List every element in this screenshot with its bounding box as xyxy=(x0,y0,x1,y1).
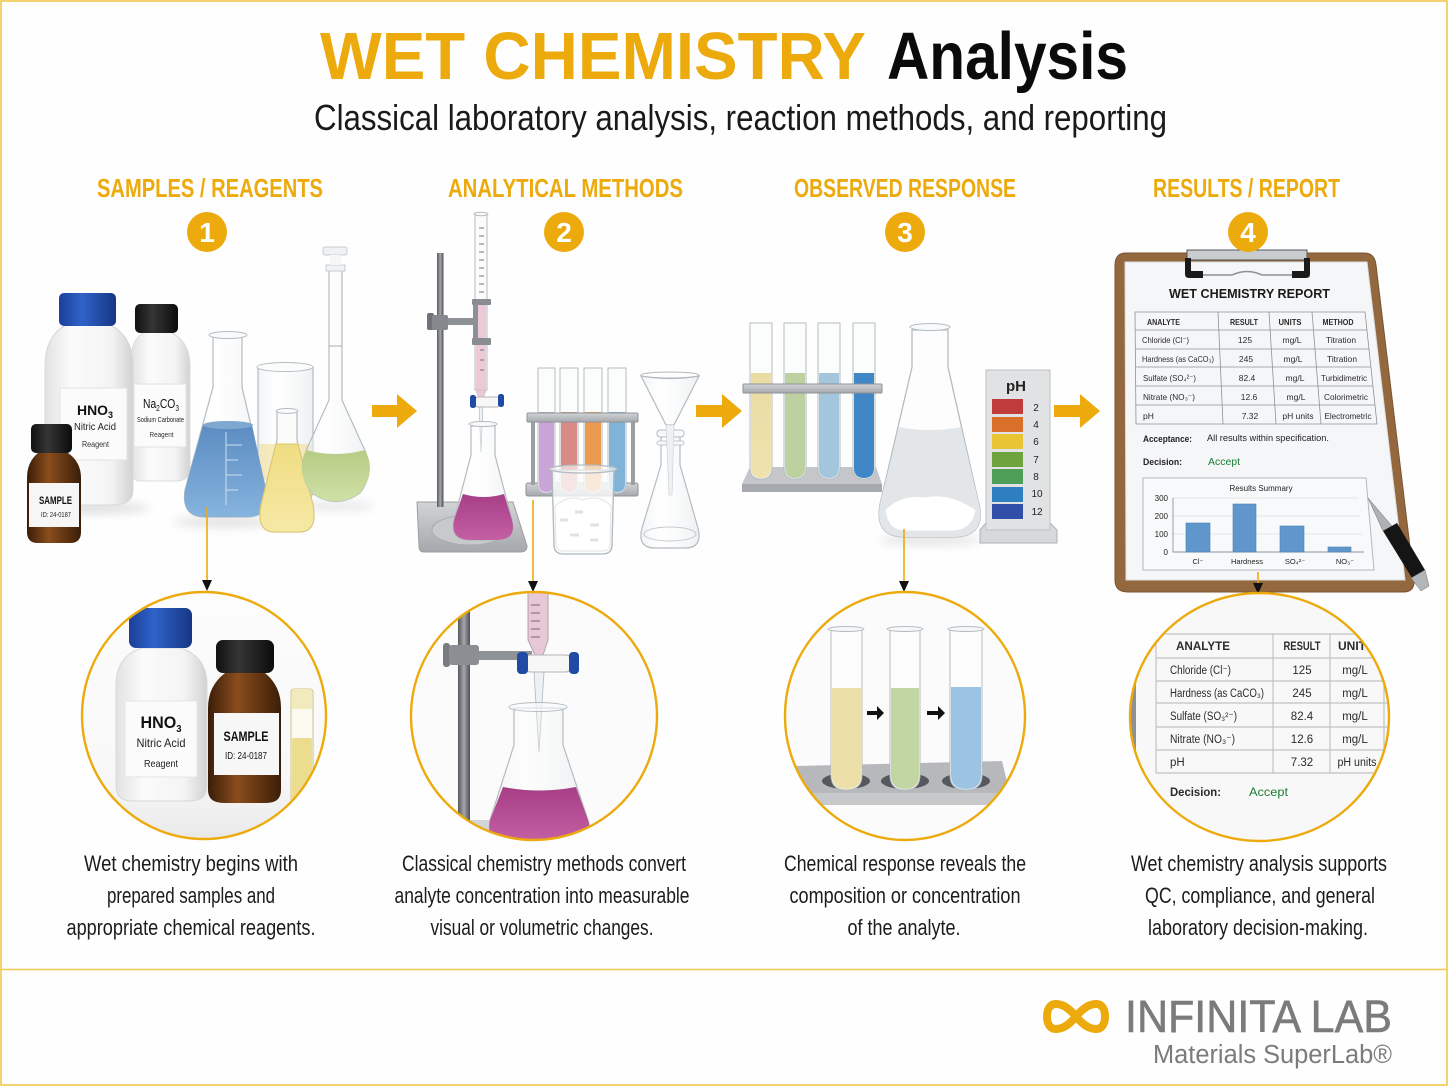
icon: pH colour card: pH xyxy=(1006,378,1026,395)
bar chart: results summary: 200 xyxy=(1155,512,1169,521)
panel: detail circle 2, titration close-up xyxy=(410,590,660,842)
report table: mg/L xyxy=(1286,373,1305,383)
arrow: connector to circle 2 xyxy=(528,500,538,592)
panel: detail circle 4, report close-up: mg/L xyxy=(1342,711,1368,723)
acceptance and decision xyxy=(1143,433,1329,468)
report table: pH units xyxy=(1282,411,1314,421)
panel: detail circle 4, report close-up: 125 xyxy=(1292,665,1312,677)
panel: detail circle 4, report close-up: 7.32 xyxy=(1291,757,1313,769)
report table: 12.6 xyxy=(1241,392,1258,402)
icon: pH colour card: 12 xyxy=(1031,507,1043,518)
icon: retort rod and clamp xyxy=(427,253,475,507)
text block: caption 2: visual or volumetric changes. xyxy=(430,915,654,940)
text block: caption 3: composition or concentration xyxy=(790,883,1020,908)
clipboard board xyxy=(1115,253,1414,592)
icon: white reagent bottle Na2CO3 xyxy=(132,304,190,481)
icon: infinity symbol xyxy=(1047,1004,1105,1029)
arrow: connector to circle 4 xyxy=(1253,572,1263,594)
report table: 245 xyxy=(1239,354,1253,364)
acceptance and decision: Accept xyxy=(1208,457,1240,468)
panel: detail circle 4, report close-up: Hardness (as CaCO₃) xyxy=(1170,688,1264,700)
panel: detail circle 1, reagents close-up: 3 xyxy=(176,724,182,735)
panel: detail circle 4, report close-up: ANALYTE xyxy=(1176,641,1230,653)
arrow: step 3 to 4 xyxy=(1054,394,1100,428)
step number 3: 3 xyxy=(897,217,913,248)
text block: caption 1 xyxy=(66,851,316,940)
report table: Hardness (as CaCO₃) xyxy=(1142,354,1214,364)
icon: beaker xyxy=(257,362,313,500)
icon: white reagent bottle Na2CO3: Sodium Carbonate xyxy=(137,415,184,424)
panel 1 equipment: bottles and glassware xyxy=(27,247,375,543)
report table: RESULT xyxy=(1230,317,1259,327)
panel: detail circle 4, report close-up: 245 xyxy=(1292,688,1312,700)
panel: detail circle 4, report close-up: mg/L xyxy=(1342,734,1368,746)
arrow: connector to circle 1 xyxy=(202,507,212,591)
icon: amber sample bottle: SAMPLE xyxy=(39,495,72,507)
icon: white reagent bottle HNO3: Reagent xyxy=(82,440,110,449)
icon: pH colour card: 6 xyxy=(1033,437,1039,448)
step number 2: 2 xyxy=(556,217,572,248)
icon: stand base plate xyxy=(417,502,527,552)
icon: funnel and empty flask xyxy=(641,372,699,548)
title: Analysis xyxy=(887,19,1128,94)
title: WET CHEMISTRY xyxy=(320,19,866,94)
text block: caption 1: Wet chemistry begins with xyxy=(84,851,298,876)
report table: pH xyxy=(1143,411,1154,421)
heading: observed response: OBSERVED RESPONSE xyxy=(794,173,1016,203)
panel: detail circle 1, reagents close-up: Nitric Acid xyxy=(136,736,186,750)
panel: detail circle 1, reagents close-up: ID: 24-0187 xyxy=(225,751,267,762)
panel: detail circle 4, report close-up: mg/L xyxy=(1342,665,1368,677)
logo tagline: Materials SuperLab® xyxy=(1153,1041,1392,1069)
panel 2 equipment: titration set-up xyxy=(417,212,699,554)
panel 3 equipment: colour change tubes, flask and pH card xyxy=(742,323,1057,544)
panel: detail circle 4, report close-up: 82.4 xyxy=(1291,711,1314,723)
report table: Electrometric xyxy=(1324,411,1372,421)
icon: pen xyxy=(1368,498,1429,591)
icon: erlenmeyer flask with white solids xyxy=(879,324,980,537)
bar chart: results summary: 300 xyxy=(1155,494,1169,503)
arrow: step 2 to 3 xyxy=(696,394,742,428)
text block: caption 2 xyxy=(394,851,690,940)
panel: detail circle 1, reagents close-up xyxy=(80,590,330,840)
acceptance and decision: All results within specification. xyxy=(1207,433,1329,443)
panel: detail circle 1, reagents close-up: SAMPLE xyxy=(224,728,268,744)
step number 3 xyxy=(885,212,925,252)
report table: Titration xyxy=(1327,354,1357,364)
report table: Titration xyxy=(1326,335,1356,345)
icon: burette with stopcock xyxy=(470,212,504,452)
text block: caption 4: Wet chemistry analysis supports xyxy=(1131,851,1387,876)
report table: ANALYTE xyxy=(1147,317,1180,327)
panel: detail circle 4, report close-up: pH units xyxy=(1338,757,1377,769)
report table: Chloride (Cl⁻) xyxy=(1142,335,1189,345)
panel: detail circle 4, report close-up: UNITS xyxy=(1338,641,1374,653)
heading: analytical methods: ANALYTICAL METHODS xyxy=(448,173,683,203)
panel: detail circle 4, report close-up: pH xyxy=(1170,757,1185,769)
bar chart: results summary: Hardness xyxy=(1231,557,1263,566)
icon: white reagent bottle Na2CO3: 2 xyxy=(156,404,160,413)
icon: pH colour card xyxy=(980,370,1057,543)
report table: mg/L xyxy=(1287,392,1306,402)
icon: white reagent bottle Na2CO3: CO xyxy=(160,397,176,411)
arrow: connector to circle 3 xyxy=(899,529,909,592)
text block: caption 1: prepared samples and xyxy=(107,883,275,908)
report table: mg/L xyxy=(1283,335,1302,345)
bar chart: results summary: Results Summary xyxy=(1229,484,1293,493)
icon: test tube rack with coloured tubes xyxy=(526,368,638,496)
icon: white reagent bottle Na2CO3: 3 xyxy=(175,404,179,413)
heading: samples / reagents: SAMPLES / REAGENTS xyxy=(97,173,323,203)
text block: caption 2: Classical chemistry methods convert xyxy=(402,851,686,876)
report table xyxy=(1135,312,1377,424)
report table: Sulfate (SO₄²⁻) xyxy=(1143,373,1196,383)
icon: pH colour card: 2 xyxy=(1033,403,1039,414)
footer divider xyxy=(1,968,1447,970)
panel: detail circle 4, report close-up: Accept xyxy=(1249,785,1289,799)
icon: white reagent bottle Na2CO3: Reagent xyxy=(150,430,174,439)
text block: caption 3 xyxy=(784,851,1026,940)
text block: caption 4 xyxy=(1131,851,1387,940)
text block: caption 4: QC, compliance, and general xyxy=(1145,883,1375,908)
bar chart: results summary: 100 xyxy=(1155,530,1169,539)
icon: beaker with white powder xyxy=(549,465,617,554)
panel 4 equipment: clipboard report xyxy=(1115,250,1429,592)
text block: caption 2: analyte concentration into measurable xyxy=(394,883,690,908)
icon: amber sample bottle xyxy=(27,424,81,543)
icon: white reagent bottle Na2CO3: Na xyxy=(143,397,159,411)
report table: Colorimetric xyxy=(1324,392,1369,402)
step number 4 xyxy=(1228,212,1268,252)
bar chart: results summary: NO₃⁻ xyxy=(1336,557,1354,566)
title xyxy=(320,19,1128,94)
panel: detail circle 4, report close-up: RESULT xyxy=(1284,641,1320,653)
panel: detail circle 4, report close-up: Nitrate (NO₃⁻) xyxy=(1170,734,1235,746)
acceptance and decision: Acceptance: xyxy=(1143,434,1192,444)
bar chart: results summary xyxy=(1143,478,1374,570)
step number 1: 1 xyxy=(199,217,215,248)
report table: UNITS xyxy=(1278,317,1302,327)
report paper xyxy=(1125,262,1405,580)
report table: mg/L xyxy=(1284,354,1303,364)
text block: caption 3: of the analyte. xyxy=(848,915,960,940)
icon: pH colour card: 4 xyxy=(1033,420,1039,431)
icon: volumetric flask green xyxy=(302,247,370,502)
report title: WET CHEMISTRY REPORT xyxy=(1169,287,1330,301)
icon: rack of four test tubes xyxy=(742,323,882,492)
panel: detail circle 4, report close-up xyxy=(1125,590,1395,845)
text block: caption 4: laboratory decision-making. xyxy=(1148,915,1368,940)
icon: pH colour card: 7 xyxy=(1033,455,1039,466)
report table: 125 xyxy=(1238,335,1252,345)
panel: detail circle 1, reagents close-up: HNO xyxy=(140,713,178,732)
report table: 7.32 xyxy=(1242,411,1259,421)
logo wordmark: INFINITA LAB xyxy=(1125,991,1392,1042)
icon: pH colour card: 10 xyxy=(1031,489,1043,500)
icon: white reagent bottle HNO3: HNO xyxy=(77,402,108,418)
report table: 82.4 xyxy=(1239,373,1256,383)
text block: caption 1: appropriate chemical reagents. xyxy=(66,915,316,940)
acceptance and decision: Decision: xyxy=(1143,457,1182,467)
logo: Infinita Lab xyxy=(1047,991,1392,1069)
text block: caption 3: Chemical response reveals the xyxy=(784,851,1026,876)
bar chart: results summary: Cl⁻ xyxy=(1192,557,1204,566)
icon: white reagent bottle HNO3: Nitric Acid xyxy=(74,422,116,433)
panel: detail circle 4, report close-up: Decision: xyxy=(1170,787,1221,799)
heading: results / report: RESULTS / REPORT xyxy=(1153,173,1340,203)
icon: amber sample bottle: ID: 24-0187 xyxy=(41,510,71,519)
panel: detail circle 4, report close-up: mg/L xyxy=(1342,688,1368,700)
panel: detail circle 4, report close-up: Chloride (Cl⁻) xyxy=(1170,665,1231,677)
report table: Turbidimetric xyxy=(1321,373,1368,383)
icon: yellow flask xyxy=(260,408,314,532)
bar chart: results summary: 0 xyxy=(1164,548,1169,557)
arrow: step 1 to 2 xyxy=(372,394,417,428)
icon: flask with magenta liquid xyxy=(453,422,513,540)
bar chart: results summary: SO₄²⁻ xyxy=(1285,557,1305,566)
icon: white reagent bottle HNO3: 3 xyxy=(108,410,113,420)
step number 1 xyxy=(187,212,227,252)
icon: pH colour card: 8 xyxy=(1033,472,1039,483)
clipboard clip xyxy=(1185,250,1310,278)
step number 4: 4 xyxy=(1240,217,1256,248)
panel: detail circle 1, reagents close-up: Reagent xyxy=(144,758,178,770)
icon: erlenmeyer flask with blue liquid xyxy=(184,332,267,517)
report table: Nitrate (NO₃⁻) xyxy=(1143,392,1195,402)
step number 2 xyxy=(544,212,584,252)
panel: detail circle 4, report close-up: 12.6 xyxy=(1291,734,1313,746)
panel: detail circle 4, report close-up: Sulfate (SO₃²⁻) xyxy=(1170,711,1237,723)
panel: detail circle 3, colour change close-up xyxy=(780,590,1030,842)
icon: white reagent bottle HNO3 xyxy=(45,293,133,505)
report table: METHOD xyxy=(1322,317,1354,327)
subtitle: Classical laboratory analysis, reaction methods, and reporting xyxy=(314,97,1167,138)
